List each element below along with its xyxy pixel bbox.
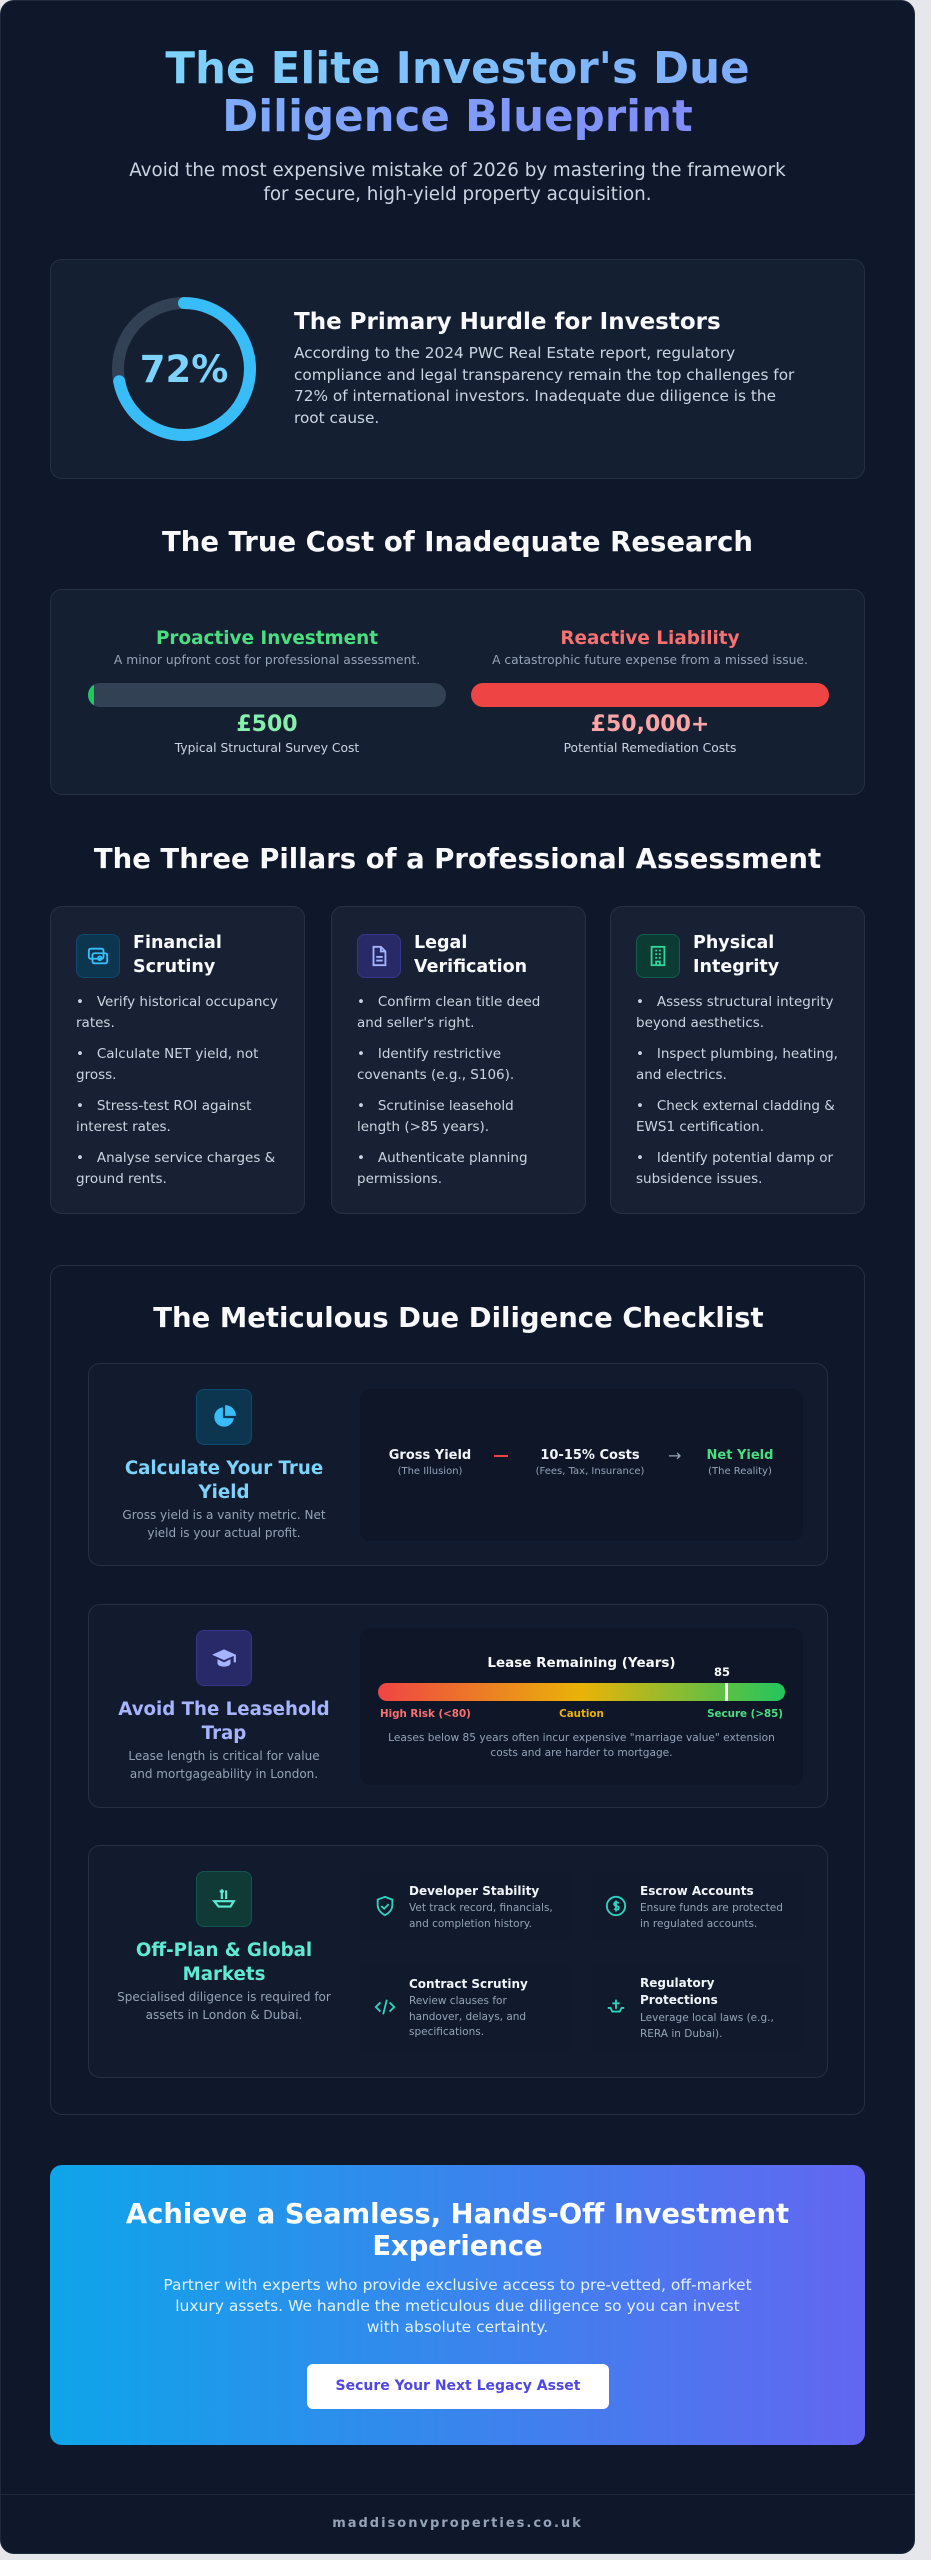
panel: financial scrutiny: gross.	[76, 1067, 116, 1083]
cell: regulatory: Protections	[640, 1993, 718, 2007]
column: reactive: A catastrophic future expense from a missed issue.	[492, 653, 808, 667]
panel: physical integrity: and electrics.	[636, 1067, 727, 1083]
panel: legal verification: and seller's right.	[357, 1015, 474, 1031]
row: true yield: yield is your actual profit.	[147, 1526, 301, 1540]
panel: physical integrity: • Check external cladding &	[636, 1098, 835, 1114]
lease gauge: High Risk (<80)	[380, 1708, 471, 1720]
row: true yield	[88, 1363, 828, 1566]
row: off-plan markets: Specialised diligence is required for	[117, 1990, 331, 2004]
row: true yield: Calculate Your True	[125, 1458, 323, 1479]
cell: contract scrutiny: Review clauses for	[409, 1995, 507, 2007]
panel: financial scrutiny: interest rates.	[76, 1119, 171, 1135]
footer: maddisonvproperties.co.uk	[332, 2516, 583, 2531]
panel: physical integrity: • Inspect plumbing, heating,	[636, 1046, 838, 1062]
subtitle: Avoid the most expensive mistake of 2026 by mastering the framework	[129, 160, 786, 181]
row: off-plan markets: assets in London & Dubai.	[146, 2008, 302, 2022]
heading: true cost: The True Cost of Inadequate Research	[162, 526, 753, 558]
column: reactive	[471, 628, 829, 755]
panel: financial scrutiny: • Stress-test ROI against	[76, 1098, 251, 1114]
yield formula: 10-15% Costs	[540, 1448, 640, 1463]
panel: physical integrity: Physical	[693, 933, 774, 953]
lease gauge: Leases below 85 years often incur expensive "marriage value" extension	[388, 1732, 775, 1744]
lease gauge: 85	[714, 1665, 730, 1679]
lease gauge: Caution	[559, 1708, 604, 1720]
panel: physical integrity: Integrity	[693, 957, 779, 977]
heading: checklist: The Meticulous Due Diligence Checklist	[153, 1302, 764, 1334]
yield formula: (Fees, Tax, Insurance)	[536, 1466, 644, 1477]
column: reactive: Potential Remediation Costs	[564, 741, 736, 755]
cell: developer stability	[360, 1871, 571, 1942]
panel: physical integrity: subsidence issues.	[636, 1171, 762, 1187]
panel: financial scrutiny: • Verify historical occupancy	[76, 994, 278, 1010]
yield formula: (The Illusion)	[398, 1466, 462, 1477]
panel: physical integrity: • Identify potential damp or	[636, 1150, 833, 1166]
panel: legal verification: • Identify restrictive	[357, 1046, 501, 1062]
CTA text: Partner with experts who provide exclusive access to pre-vetted, off-market	[163, 2276, 752, 2294]
row: true yield: Gross yield is a vanity metric. Net	[122, 1508, 326, 1522]
column: proactive: Typical Structural Survey Cost	[175, 741, 359, 755]
cell: contract scrutiny: specifications.	[409, 2026, 484, 2038]
cell: developer stability: Vet track record, financials,	[409, 1902, 553, 1914]
cell: escrow: Ensure funds are protected	[640, 1902, 783, 1914]
bar: small cost	[88, 683, 446, 707]
panel: legal verification: • Scrutinise leasehold	[357, 1098, 514, 1114]
panel: legal verification: • Confirm clean title deed	[357, 994, 540, 1010]
panel: financial scrutiny	[50, 906, 305, 1214]
row: leasehold trap: and mortgageability in London.	[130, 1767, 318, 1781]
row: leasehold trap: Avoid The Leasehold	[118, 1699, 330, 1720]
row: true yield: Yield	[198, 1482, 250, 1503]
title: The Elite Investor's Due	[165, 44, 750, 94]
yield formula	[360, 1389, 803, 1541]
panel: physical integrity: beyond aesthetics.	[636, 1015, 764, 1031]
panel: legal verification: Verification	[414, 957, 527, 977]
column: reactive: Reactive Liability	[560, 628, 740, 649]
subtitle: for secure, high-yield property acquisition.	[263, 184, 652, 205]
panel: financial scrutiny: • Calculate NET yield, not	[76, 1046, 258, 1062]
CTA heading: Achieve a Seamless, Hands-Off Investment	[126, 2199, 789, 2230]
cell: regulatory: Regulatory	[640, 1976, 714, 1990]
panel: legal verification	[331, 906, 586, 1214]
panel: legal verification: covenants (e.g., S106).	[357, 1067, 514, 1083]
yield formula: →	[668, 1446, 681, 1465]
heading: three pillars: The Three Pillars of a Professional Assessment	[94, 843, 821, 875]
CTA text: luxury assets. We handle the meticulous due diligence so you can invest	[175, 2297, 740, 2315]
ring chart 72%: 72%	[140, 348, 228, 391]
CTA button	[307, 2364, 609, 2409]
cell: contract scrutiny	[360, 1963, 571, 2052]
CTA text: with absolute certainty.	[367, 2318, 548, 2336]
hurdle text	[294, 344, 794, 426]
hurdle text: root cause.	[294, 408, 379, 426]
cell: regulatory: RERA in Dubai).	[640, 2028, 722, 2040]
CTA text	[163, 2276, 752, 2336]
row: leasehold trap	[88, 1604, 828, 1808]
CTA button: Secure Your Next Legacy Asset	[335, 2378, 580, 2394]
panel: legal verification: permissions.	[357, 1171, 442, 1187]
icon: money	[76, 934, 120, 978]
lease gauge: Lease Remaining (Years)	[487, 1655, 676, 1671]
row: leasehold trap: Trap	[202, 1723, 246, 1744]
row: off-plan markets	[88, 1845, 828, 2078]
cell: contract scrutiny: handover, delays, and	[409, 2010, 526, 2022]
cell: developer stability: and completion history.	[409, 1918, 532, 1930]
panel: physical integrity: EWS1 certification.	[636, 1119, 764, 1135]
panel: financial scrutiny: rates.	[76, 1015, 115, 1031]
cell: escrow: in regulated accounts.	[640, 1918, 757, 1930]
bar: large cost	[471, 683, 829, 707]
cell: escrow: Escrow Accounts	[640, 1884, 754, 1898]
row: off-plan markets: Markets	[183, 1964, 265, 1985]
hurdle text: 72% of international investors. Inadequate due diligence is the	[294, 387, 776, 405]
icon: ship	[196, 1871, 252, 1927]
hurdle text: compliance and legal transparency remain the top challenges for	[294, 366, 794, 384]
panel: physical integrity	[610, 906, 865, 1214]
subtitle	[129, 160, 786, 205]
panel: financial scrutiny: • Analyse service charges &	[76, 1150, 275, 1166]
icon: building	[636, 934, 680, 978]
CTA heading	[126, 2199, 789, 2262]
column: proactive: £500	[236, 712, 298, 737]
panel: financial scrutiny: Financial	[133, 933, 222, 953]
panel: financial scrutiny: Scrutiny	[133, 957, 215, 977]
lease gauge: Secure (>85)	[707, 1708, 783, 1720]
column: proactive	[88, 628, 446, 755]
icon: cap	[196, 1630, 252, 1686]
cell: regulatory: Leverage local laws (e.g.,	[640, 2012, 774, 2024]
column: proactive: A minor upfront cost for professional assessment.	[114, 653, 420, 667]
column: proactive: Proactive Investment	[156, 628, 378, 649]
yield formula: Net Yield	[707, 1448, 773, 1463]
cell: regulatory	[591, 1963, 803, 2052]
cell: contract scrutiny: Contract Scrutiny	[409, 1977, 528, 1991]
panel: legal verification: • Authenticate planning	[357, 1150, 528, 1166]
row: off-plan markets: Off-Plan & Global	[136, 1940, 312, 1961]
lease gauge	[360, 1628, 803, 1785]
title	[165, 44, 750, 142]
panel: financial scrutiny: ground rents.	[76, 1171, 167, 1187]
ring chart 72%	[112, 297, 256, 441]
cell: escrow	[591, 1871, 803, 1942]
CTA banner	[50, 2165, 865, 2445]
panel: physical integrity: • Assess structural integrity	[636, 994, 833, 1010]
panel: legal verification: Legal	[414, 933, 467, 953]
CTA heading: Experience	[372, 2231, 543, 2262]
lease gauge: costs and are harder to mortgage.	[490, 1747, 673, 1759]
yield formula: Gross Yield	[389, 1448, 471, 1463]
hurdle heading: The Primary Hurdle for Investors	[294, 309, 721, 335]
icon: pie chart	[196, 1389, 252, 1445]
yield formula: (The Reality)	[708, 1466, 772, 1477]
panel: cost comparison	[50, 589, 865, 795]
icon: document	[357, 934, 401, 978]
row: leasehold trap: Lease length is critical for value	[128, 1749, 320, 1763]
panel: checklist	[50, 1265, 865, 2115]
title: Diligence Blueprint	[222, 92, 693, 142]
panel: legal verification: length (>85 years).	[357, 1119, 489, 1135]
panel: primary hurdle stat	[50, 259, 865, 479]
cell: developer stability: Developer Stability	[409, 1884, 539, 1898]
hurdle text: According to the 2024 PWC Real Estate report, regulatory	[294, 344, 735, 362]
column: reactive: £50,000+	[591, 712, 709, 737]
